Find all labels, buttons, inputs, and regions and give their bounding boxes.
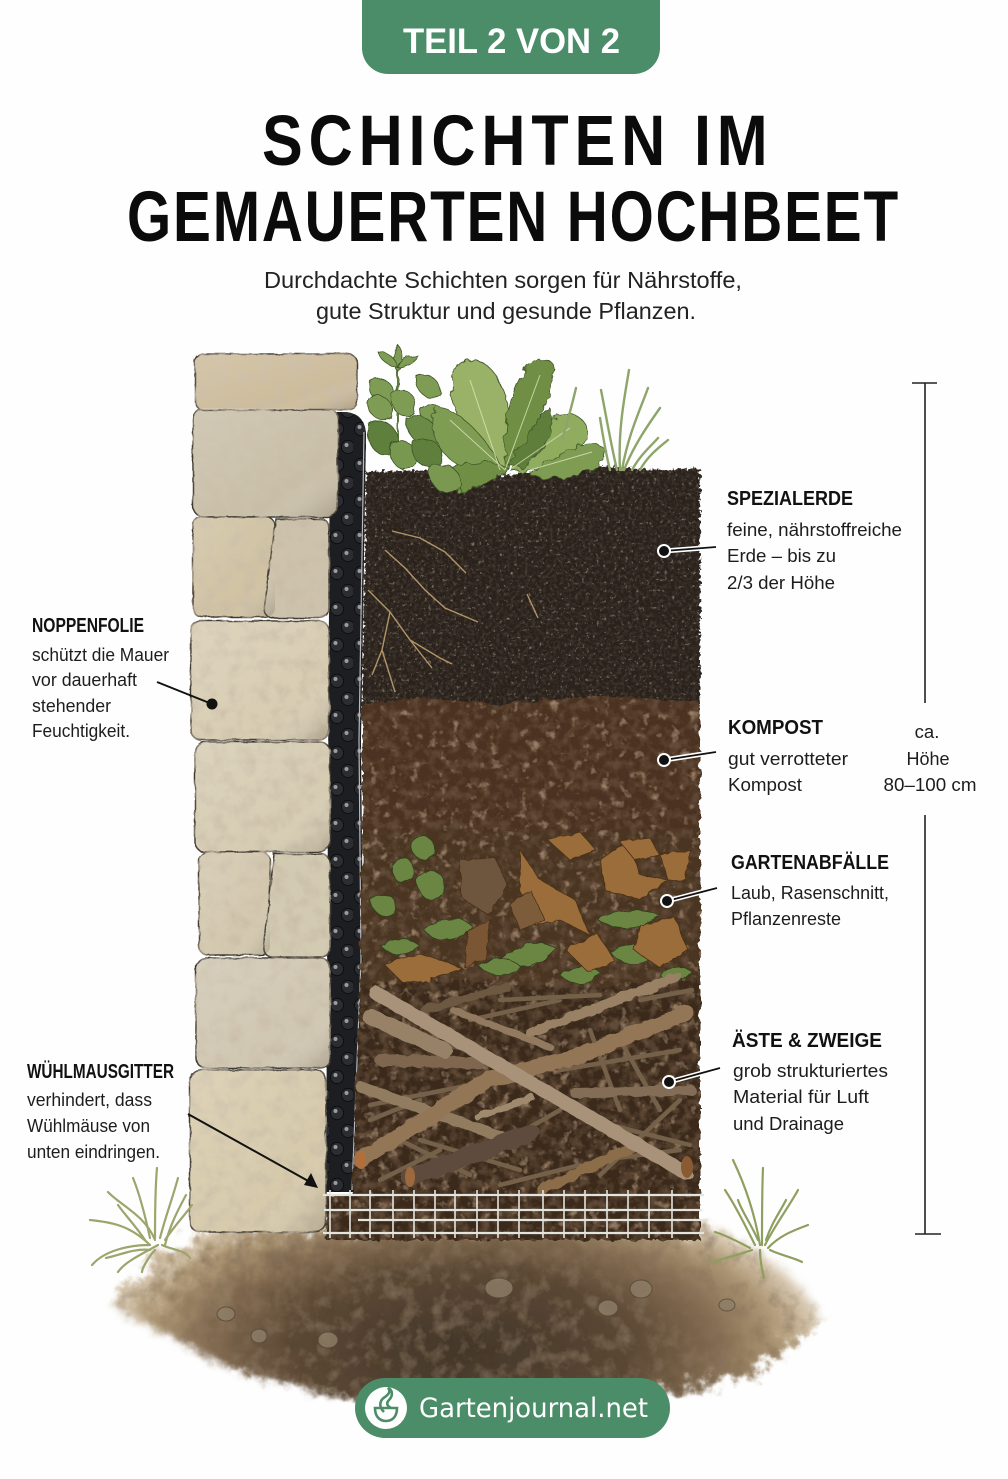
label: Kompost: Kompost — [728, 774, 802, 795]
label: Noppenfolie: Feuchtigkeit. — [32, 720, 130, 741]
plant: grass — [562, 370, 668, 470]
label: Wühlmausgitter: verhindert, dass — [27, 1089, 152, 1110]
stone shading — [190, 354, 357, 1232]
label: Äste und Zweige: und Drainage — [733, 1113, 844, 1134]
label: Äste und Zweige: ÄSTE & ZWEIGE — [732, 1029, 882, 1052]
pointer: Kompost — [658, 752, 716, 766]
twigs — [370, 990, 692, 1185]
ground soil — [110, 1228, 845, 1398]
label: Spezialerde: feine, nährstoffreiche — [727, 519, 902, 540]
wall stones — [190, 354, 357, 1232]
plants — [368, 345, 668, 494]
title: SCHICHTEN IM — [262, 102, 768, 181]
label: Spezialerde: Erde – bis zu — [727, 545, 836, 566]
label: Kompost: KOMPOST — [728, 717, 823, 739]
label: Gartenabfälle: GARTENABFÄLLE — [731, 851, 889, 874]
subtitle — [264, 267, 742, 324]
roots — [368, 531, 538, 692]
label: Wühlmausgitter: Wühlmäuse von — [27, 1115, 150, 1136]
height label: ca. — [915, 721, 939, 742]
footer logo pill: Gartenjournal.net — [419, 1393, 648, 1424]
label: Wühlmausgitter: unten eindringen. — [27, 1141, 160, 1162]
layer: branches and twigs — [326, 977, 700, 1240]
height ruler — [912, 383, 941, 1234]
leaves — [370, 832, 692, 998]
subtitle: Durchdachte Schichten sorgen für Nährstoffe, — [264, 267, 742, 293]
height label: Höhe — [906, 748, 950, 769]
label: Äste und Zweige: Material für Luft — [733, 1086, 869, 1107]
label: Spezialerde — [727, 488, 902, 593]
layer: compost — [362, 696, 700, 836]
label: Kompost — [728, 717, 848, 795]
label: Noppenfolie: NOPPENFOLIE — [32, 615, 144, 637]
grass tuft: left — [90, 1168, 192, 1272]
label: Kompost: gut verrotteter — [728, 748, 848, 769]
badge: part 2 of 2: TEIL 2 VON 2 — [403, 22, 620, 61]
label: Wühlmausgitter: WÜHLMAUSGITTER — [27, 1060, 174, 1083]
title — [127, 102, 898, 256]
plant: centre leafy greens — [428, 359, 606, 494]
title: GEMAUERTEN HOCHBEET — [127, 177, 898, 256]
icon: plant in bowl — [365, 1387, 407, 1429]
label: Noppenfolie: schützt die Mauer — [32, 644, 169, 665]
branches — [361, 977, 691, 1190]
label: Noppenfolie: vor dauerhaft — [32, 669, 137, 690]
wire mesh — [323, 1190, 708, 1238]
label: Gartenabfälle: Laub, Rasenschnitt, — [731, 882, 889, 903]
label: Wühlmausgitter — [27, 1060, 174, 1162]
label: Äste und Zweige — [732, 1029, 888, 1134]
height label: 80–100 cm — [884, 774, 976, 795]
badge: part 2 of 2 — [362, 0, 660, 74]
label: Spezialerde: 2/3 der Höhe — [727, 572, 835, 593]
layer: garden waste — [360, 828, 700, 998]
plant veins — [450, 375, 592, 470]
pointer: Gartenabfälle — [661, 888, 717, 907]
subtitle: gute Struktur und gesunde Pflanzen. — [316, 298, 696, 324]
label: Gartenabfälle — [731, 851, 889, 929]
pointer: Spezialerde — [658, 545, 716, 557]
pointer: Äste und Zweige — [663, 1068, 720, 1088]
pointer: Noppenfolie — [157, 682, 218, 710]
ground stones — [217, 1278, 735, 1348]
arrow: Wühlmausgitter — [188, 1114, 318, 1188]
protective dimple membrane — [326, 412, 366, 1192]
label: Gartenabfälle: Pflanzenreste — [731, 908, 841, 929]
grass tuft: right — [712, 1160, 808, 1278]
label: Noppenfolie — [32, 615, 169, 741]
label: Noppenfolie: stehender — [32, 695, 111, 716]
label: Äste und Zweige: grob strukturiertes — [733, 1060, 888, 1081]
layer: special soil — [362, 466, 700, 708]
footer logo pill — [355, 1378, 670, 1438]
label: Spezialerde: SPEZIALERDE — [727, 488, 853, 510]
plant: left herb — [368, 345, 444, 469]
height label — [884, 721, 976, 795]
